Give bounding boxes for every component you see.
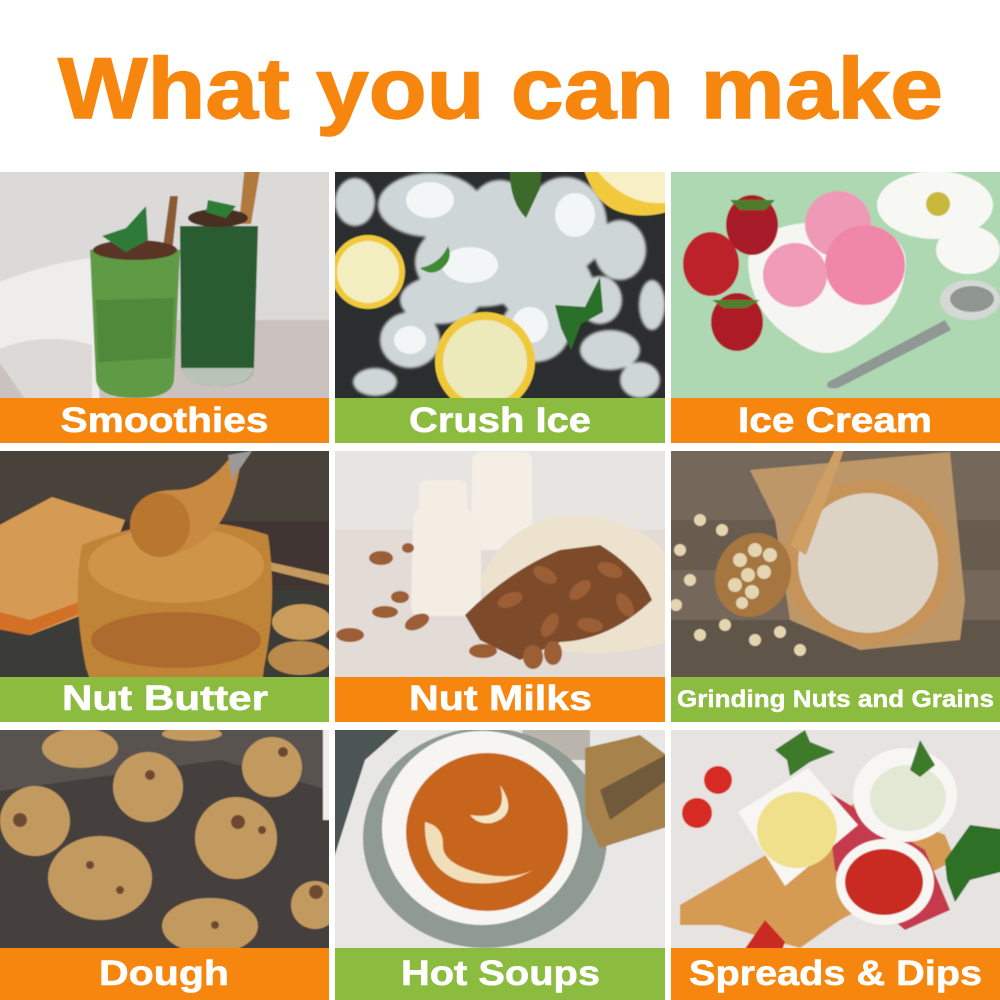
label: Hot Soups (335, 948, 665, 1000)
label: Smoothies (0, 398, 329, 443)
label: Crush Ice (335, 398, 665, 443)
panel: grinding nuts and grains (663, 443, 1000, 722)
photo: dips on a cutting board (663, 722, 1000, 956)
label: Dough: Dough (99, 954, 229, 993)
label: Nut Butter: Nut Butter (62, 679, 268, 718)
photo: bowl of soup (335, 730, 665, 948)
label: Grinding Nuts and Grains: Grinding Nuts and Grains (677, 686, 994, 713)
panel: spreads and dips (663, 722, 1000, 1000)
photo: peanut butter jar (0, 443, 337, 685)
label: Nut Milks (335, 677, 665, 722)
label: Smoothies: Smoothies (60, 401, 268, 440)
panel: dough (0, 722, 339, 1000)
label: Grinding Nuts and Grains (671, 677, 1000, 722)
label: Spreads & Dips: Spreads & Dips (689, 954, 982, 993)
label: Nut Butter (0, 677, 329, 722)
label: Nut Milks: Nut Milks (409, 679, 592, 718)
label: Dough (0, 948, 329, 1000)
title: What you can make (58, 41, 943, 137)
photo: flour bowl and chickpeas (663, 443, 1000, 685)
label: Ice Cream: Ice Cream (738, 401, 932, 440)
panel: hot soups (327, 722, 673, 1000)
label: Hot Soups: Hot Soups (401, 954, 600, 993)
photo: crushed ice and lemons (335, 172, 665, 398)
panel: crush ice (327, 164, 673, 443)
label: Ice Cream (671, 398, 1000, 443)
photo: ice cream bowl (663, 164, 1000, 406)
panel: nut butter (0, 443, 337, 722)
panel: smoothies (0, 164, 337, 443)
photo: green smoothies (0, 164, 337, 406)
label: Crush Ice: Crush Ice (409, 401, 591, 440)
photo: cookie dough balls (0, 722, 339, 956)
panel: ice cream (663, 164, 1000, 443)
photo: almond milk and almonds (335, 451, 665, 677)
panel: nut milks (327, 443, 673, 722)
label: Spreads & Dips (671, 948, 1000, 1000)
